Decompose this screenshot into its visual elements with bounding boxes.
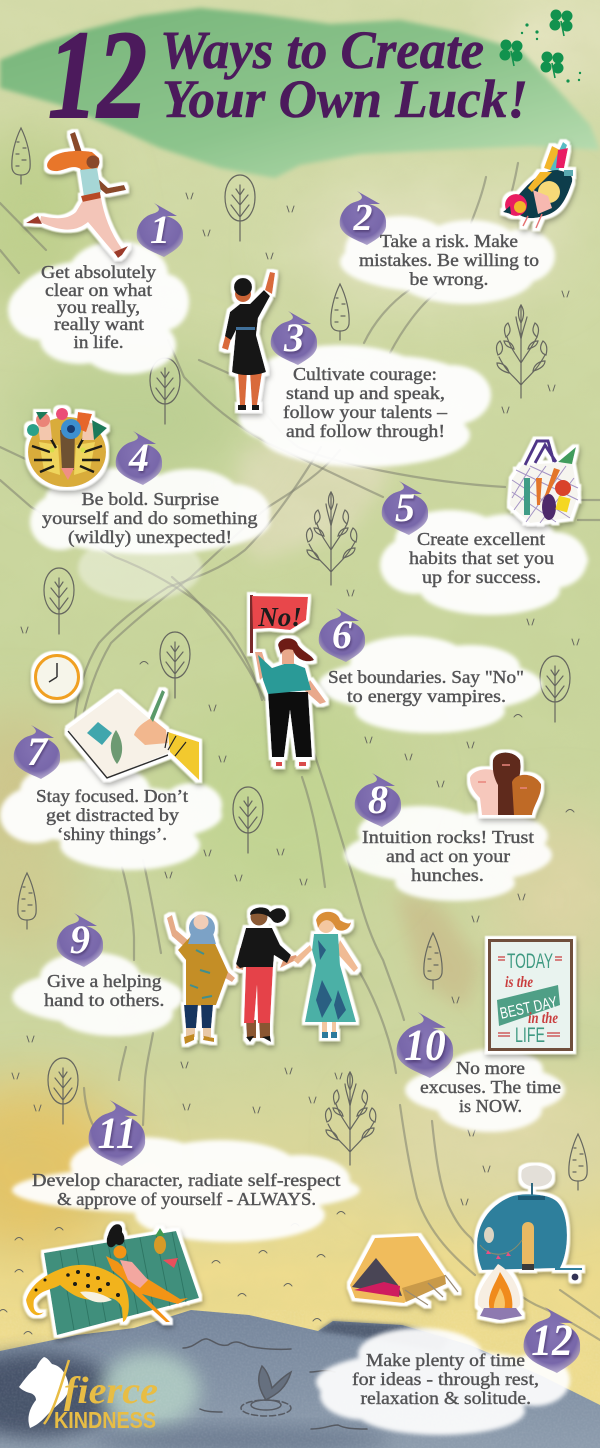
title: 12 [48, 6, 147, 145]
sea drawings: waves and mermaid tail [183, 1339, 367, 1429]
text 10: No more [456, 1058, 525, 1078]
text 7: Stay focused. Don’t [36, 786, 188, 806]
logo: Fierce Kindness [19, 1357, 158, 1433]
text 8: Intuition rocks! Trust [362, 827, 534, 847]
cloud 4 lower haze [78, 535, 202, 601]
badge 11 [89, 1100, 145, 1166]
icon: tent sticker [350, 1236, 458, 1305]
badge 8 [355, 773, 401, 827]
icon: woman raising fist sticker [222, 272, 275, 410]
badge 7: 7 [27, 729, 49, 774]
text 1: really want [54, 314, 144, 334]
badge 3: 3 [283, 315, 304, 360]
text 12: Make plenty of time [366, 1350, 525, 1370]
cloud 11 [12, 1137, 360, 1242]
text 3 [283, 364, 447, 441]
logo: Fierce Kindness: KINDNESS [54, 1407, 156, 1433]
text 1: in life. [74, 332, 124, 352]
cloud 8 [344, 806, 552, 901]
text 11 [32, 1170, 341, 1209]
grass marks [0, 193, 579, 1334]
cloud 3 [238, 345, 491, 467]
text 2: be wrong. [410, 269, 488, 289]
icon: today poster sticker: is the [505, 974, 533, 991]
icon: today poster sticker: in the [528, 1010, 558, 1027]
icon: camper and campfire sticker [477, 1165, 582, 1320]
badge 1 [137, 203, 183, 257]
panel: tip 9 [12, 907, 358, 1044]
text 9: hand to others. [44, 990, 164, 1010]
icon: three women holding hands sticker [167, 907, 358, 1044]
text 3: and follow through! [286, 421, 445, 441]
icon: today poster sticker: LIFE [515, 1024, 545, 1047]
panel: tip 1 [8, 132, 189, 374]
text 8: hunches. [411, 865, 484, 885]
panel: tip 4 [27, 408, 270, 601]
badge 6 [319, 608, 365, 662]
text 8 [362, 827, 534, 885]
icon: raised fists sticker [470, 752, 541, 815]
text 12 [352, 1350, 539, 1408]
text 4: yourself and do something [42, 508, 258, 528]
text 1: you really, [57, 297, 140, 317]
text 11: Develop character, radiate self-respect [32, 1170, 341, 1190]
text 5: habits that set you [409, 548, 554, 568]
text 3: stand up and speak, [286, 383, 445, 403]
title: Your Own Luck! [162, 69, 528, 129]
badge 10 [397, 1012, 453, 1078]
cloud 12 [316, 1328, 570, 1435]
badge 12: 12 [531, 1316, 573, 1365]
icon: today poster sticker [488, 939, 573, 1051]
text 7: get distracted by [46, 805, 179, 825]
cloud 9 [12, 952, 184, 1036]
text 10: is NOW. [459, 1096, 522, 1116]
badge 4: 4 [128, 435, 149, 480]
text 6: to energy vampires. [347, 686, 506, 706]
panel: tip 2 [340, 142, 573, 304]
icon: today poster sticker: BEST DAY [499, 994, 559, 1023]
trees [12, 128, 587, 1190]
badge 8: 8 [368, 777, 388, 822]
icon: clock sticker [34, 654, 80, 700]
panel: tip 7 [0, 690, 222, 870]
badge 9: 9 [70, 917, 90, 962]
badge 1: 1 [150, 207, 170, 252]
icon: bird sticker [503, 142, 573, 228]
icon: today poster sticker: TODAY [507, 950, 553, 973]
text 8: and act on your [386, 846, 510, 866]
text 1: clear on what [45, 280, 152, 300]
badge 3 [271, 311, 317, 365]
text 9: Give a helping [47, 971, 162, 991]
badge 4 [116, 431, 162, 485]
icon: woman with No flag sticker: No! [257, 602, 302, 632]
text 7: ‘shiny things’. [57, 824, 167, 844]
logo: Fierce Kindness: fierce [64, 1370, 158, 1412]
text 4: Be bold. Surprise [82, 489, 219, 509]
icon: tiger with flowers sticker [27, 408, 107, 487]
text 4 [42, 489, 258, 547]
icon: runner sticker [26, 132, 128, 258]
badge 10: 10 [404, 1021, 446, 1070]
text 6 [328, 667, 524, 706]
text 1 [41, 262, 156, 352]
text 7 [36, 786, 188, 844]
text 3: follow your talents – [283, 402, 447, 422]
icon: shamrocks [500, 10, 581, 83]
text 10: excuses. The time [420, 1077, 561, 1097]
text 2: Take a risk. Make [380, 231, 518, 251]
text 3: Cultivate courage: [293, 364, 437, 384]
badge 2 [340, 191, 386, 245]
text 4: (wildly) unexpected! [68, 527, 232, 547]
title [48, 6, 528, 145]
sea [0, 1310, 600, 1448]
cloud 5 [380, 510, 588, 615]
cloud 4 [30, 468, 270, 554]
badge 12 [524, 1307, 580, 1373]
panel: tip 8 [344, 752, 552, 901]
cloud 7 [0, 760, 222, 870]
text 2 [359, 231, 539, 289]
text 12: for ideas - through rest, [352, 1369, 539, 1389]
badge 11: 11 [97, 1109, 137, 1158]
panel: tip 5 [380, 441, 588, 615]
text 12: relaxation & solitude. [360, 1388, 531, 1408]
text 9 [44, 971, 164, 1010]
text 5 [409, 529, 554, 587]
text 5: up for success. [422, 567, 541, 587]
badge 2: 2 [352, 197, 372, 239]
badge 5: 5 [395, 485, 415, 530]
text 6: Set boundaries. Say "No" [328, 667, 524, 687]
green watercolor wash [0, 8, 600, 178]
text 10 [420, 1058, 561, 1116]
badge 5 [382, 481, 428, 535]
badge 7 [14, 725, 60, 779]
cloud 10 [405, 1049, 565, 1132]
text 2: mistakes. Be willing to [359, 250, 539, 270]
badge 6: 6 [332, 612, 352, 657]
cloud 1 [8, 241, 189, 374]
icon: woman with No flag sticker [250, 595, 326, 766]
badge 9 [57, 913, 103, 967]
text 11: & approve of yourself - ALWAYS. [57, 1189, 316, 1209]
cloud 2 [340, 216, 555, 304]
text 1: Get absolutely [41, 262, 156, 282]
panel: tip 10 [397, 939, 573, 1132]
icon: notebook and hand sticker [68, 690, 199, 780]
cloud 6 [318, 636, 542, 733]
text 5: Create excellent [417, 529, 545, 549]
panel: tip 12 [316, 1307, 580, 1435]
icon: market bag sticker [510, 441, 578, 523]
panel: tip 11 [12, 1100, 360, 1335]
title: Ways to Create [160, 20, 484, 80]
panel: tip 6 [250, 595, 542, 766]
icon: towel with leopard and woman sticker [26, 1224, 199, 1335]
panel: tip 3 [222, 272, 491, 467]
